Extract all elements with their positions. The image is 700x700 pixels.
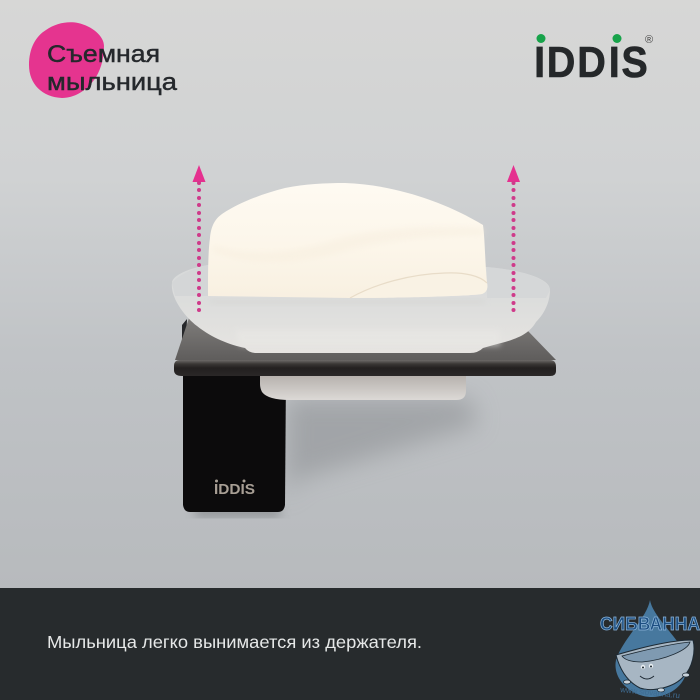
frosted glass soap dish (172, 265, 550, 353)
soap bar (208, 183, 487, 298)
shelf plate (174, 318, 556, 376)
footer band (0, 588, 700, 700)
badge: pink blob (29, 22, 104, 98)
arrow: right up (507, 165, 520, 312)
wall shadow under shelf (195, 398, 478, 516)
bathtub feet (624, 673, 690, 692)
brand name: СИБВАННА (600, 614, 700, 634)
footer caption: Мыльница легко вынимается из держателя. (47, 632, 422, 652)
url: www.sibvanna.ru (619, 685, 680, 700)
watermark: Сибванна (600, 600, 700, 700)
water drop (615, 600, 687, 697)
arrow: left up (192, 165, 206, 312)
heading: мыльница (47, 69, 178, 96)
bracket logo: IDDIS (214, 482, 255, 498)
heading: Съемная (47, 41, 160, 68)
brand logo: IDDIS: ® (645, 34, 653, 46)
wall bracket (182, 319, 286, 512)
heading (47, 41, 178, 96)
bathtub face (640, 664, 654, 679)
brand logo: IDDIS: IDDIS (534, 37, 648, 86)
frosted dish lower part (260, 376, 466, 400)
bathtub (616, 640, 694, 690)
